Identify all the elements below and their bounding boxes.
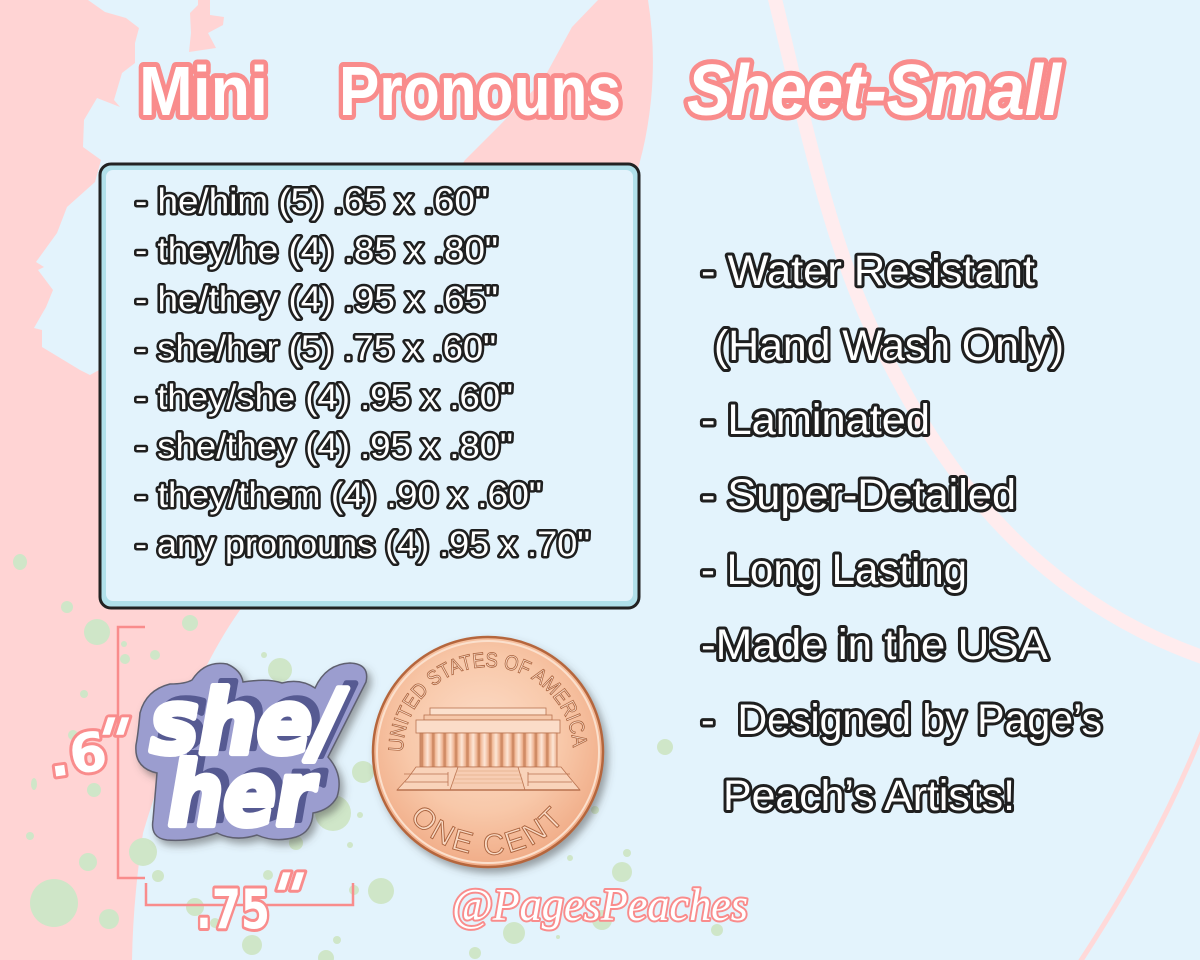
- sticker lettering shadow: she/: [158, 666, 356, 769]
- features list: - Water Resistant: [701, 247, 1035, 295]
- sticker sizes text: - he/they (4) .95 x .65": [135, 280, 498, 319]
- features list: -Made in the USA: [701, 621, 1048, 669]
- title: Mini: [139, 52, 268, 130]
- features list: (Hand Wash Only): [714, 322, 1064, 370]
- sticker lettering: her: [168, 743, 318, 846]
- title: Sheet-Small: [687, 51, 1063, 131]
- features list: - Designed by Page’s: [701, 696, 1102, 744]
- height dimension bracket: ": [82, 706, 139, 780]
- sticker sizes text: - she/her (5) .75 x .60": [135, 329, 496, 368]
- sticker lettering: [150, 671, 348, 846]
- height dimension bracket: [44, 627, 145, 878]
- sticker sizes text: - they/them (4) .90 x .60": [135, 476, 542, 515]
- panel: sizes list: [100, 164, 639, 608]
- sticker sizes text: - they/he (4) .85 x .80": [135, 231, 498, 270]
- features list: - Long Lasting: [701, 546, 967, 594]
- sticker sizes text: [135, 182, 590, 564]
- coin lettering: [388, 652, 588, 856]
- sticker sizes text: - she/they (4) .95 x .80": [135, 427, 513, 466]
- features list: - Super-Detailed: [701, 471, 1016, 519]
- title: [139, 51, 1063, 131]
- features list: - Laminated: [701, 396, 930, 444]
- sticker sizes text: - he/him (5) .65 x .60": [135, 182, 488, 221]
- one cent coin: [371, 636, 613, 878]
- she/her sticker: [136, 663, 367, 846]
- sticker sizes text: - any pronouns (4) .95 x .70": [135, 525, 590, 564]
- coin lettering: UNITED STATES OF AMERICA: [388, 652, 588, 751]
- title: Pronouns: [339, 52, 621, 130]
- features list: [701, 247, 1102, 820]
- height dimension bracket: .6: [44, 719, 112, 790]
- sticker sizes text: - they/she (4) .95 x .60": [135, 378, 513, 417]
- sticker lettering shadow: [158, 666, 356, 841]
- width dimension bracket: .75: [196, 878, 270, 941]
- width dimension bracket: ": [257, 861, 314, 935]
- coin lettering: ONE CENT: [413, 805, 560, 856]
- sticker lettering: she/: [150, 671, 348, 774]
- watermark handle: @PagesPeaches: [452, 879, 748, 930]
- features list: Peach’s Artists!: [723, 772, 1015, 820]
- paint splatter: [13, 554, 723, 960]
- memorial building: [397, 708, 580, 790]
- width dimension bracket: [146, 861, 353, 941]
- sticker lettering shadow: her: [176, 738, 326, 841]
